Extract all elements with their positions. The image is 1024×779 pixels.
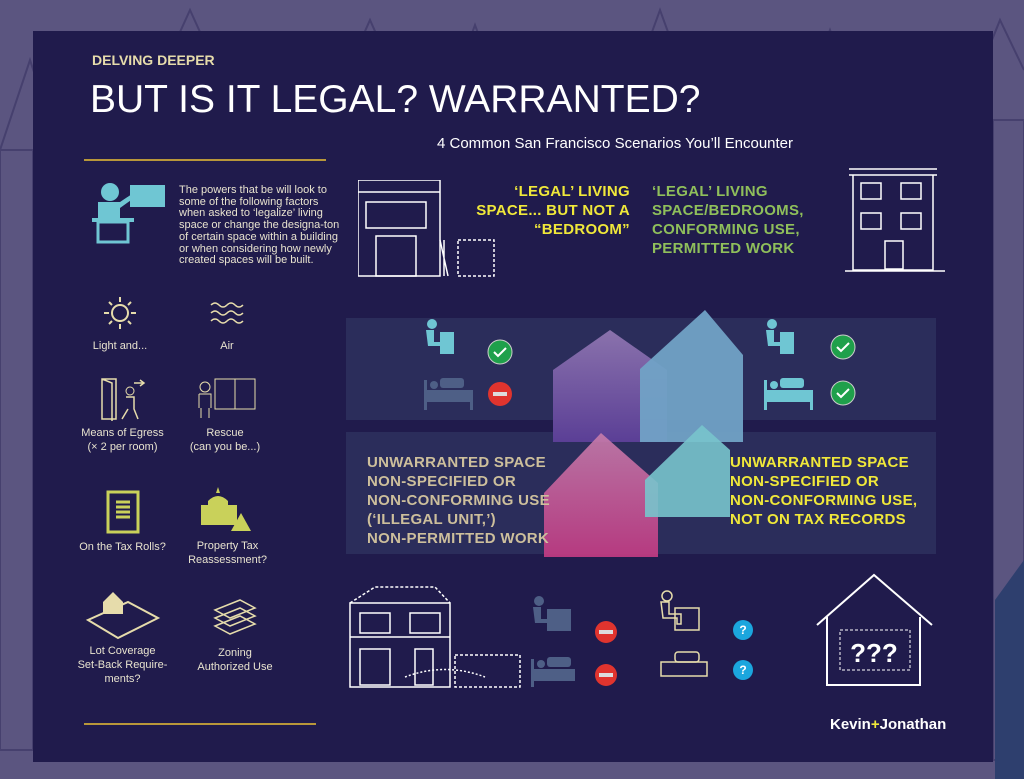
icons left row xyxy=(424,319,512,410)
factor: tax rolls xyxy=(79,490,166,553)
caption: legal bedrooms: PERMITTED WORK xyxy=(652,240,795,257)
title: BUT IS IT LEGAL? WARRANTED? xyxy=(90,78,700,121)
factor: rescue xyxy=(190,378,260,453)
factor: light: Light and... xyxy=(93,340,147,352)
factor: rescue: (can you be...) xyxy=(190,441,260,453)
factor: light xyxy=(93,297,147,352)
caption: legal not bedroom xyxy=(476,183,630,238)
caption: unwarranted right: NOT ON TAX RECORDS xyxy=(730,511,906,528)
illustration: bottom building xyxy=(349,586,521,688)
intro text: The powers that be will look to some of the following factors when asked to ‘legalize’ living space or change the designa-ton of certain space within a building or when considering how newly created spaces will be built. xyxy=(179,184,339,266)
factor: air xyxy=(210,302,244,352)
factor: zoning xyxy=(197,599,273,673)
caption: legal bedrooms: ‘LEGAL’ LIVING xyxy=(652,183,768,200)
factor: lot coverage: ments? xyxy=(104,673,141,685)
factor: egress: Means of Egress xyxy=(81,427,164,439)
band upper xyxy=(346,318,936,420)
caption: unwarranted right: UNWARRANTED SPACE xyxy=(730,454,909,471)
factor: reassessment: Reassessment? xyxy=(188,554,267,566)
factor: tax rolls: On the Tax Rolls? xyxy=(79,541,166,553)
factor: lot coverage xyxy=(78,592,167,685)
caption: legal bedrooms: CONFORMING USE, xyxy=(652,221,800,238)
caption: unwarranted left xyxy=(367,454,550,547)
subtitle: 4 Common San Francisco Scenarios You’ll Encounter xyxy=(437,135,793,152)
caption: unwarranted left: (‘ILLEGAL UNIT,’) xyxy=(367,511,496,528)
caption: legal not bedroom: “BEDROOM” xyxy=(534,221,630,238)
factor: rescue: Rescue xyxy=(206,427,244,439)
factor: zoning: Zoning xyxy=(218,647,252,659)
caption: unwarranted left: UNWARRANTED SPACE xyxy=(367,454,546,471)
factor: egress: (× 2 per room) xyxy=(88,441,158,453)
gold rule top xyxy=(84,159,326,161)
illustration: building top left xyxy=(358,180,495,277)
factor: reassessment xyxy=(188,487,267,566)
illustration: mystery house xyxy=(816,574,933,686)
factor: egress xyxy=(81,378,164,453)
factor: air: Air xyxy=(220,340,234,352)
caption: legal bedrooms: SPACE/BEDROOMS, xyxy=(652,202,804,219)
caption: unwarranted right xyxy=(730,454,917,528)
logo: Kevin+Jonathan xyxy=(830,716,946,733)
factor: reassessment: Property Tax xyxy=(197,540,258,552)
band lower xyxy=(346,432,936,554)
factor: lot coverage: Lot Coverage xyxy=(89,645,156,657)
icon: presenter xyxy=(92,183,165,244)
kicker: DELVING DEEPER xyxy=(92,52,215,68)
caption: legal not bedroom: SPACE... BUT NOT A xyxy=(476,202,630,219)
caption: unwarranted left: NON-SPECIFIED OR xyxy=(367,473,516,490)
factor: lot coverage: Set-Back Require- xyxy=(78,659,167,671)
houses overlay xyxy=(544,310,743,557)
caption: unwarranted right: NON-SPECIFIED OR xyxy=(730,473,879,490)
caption: legal bedrooms xyxy=(652,183,804,257)
gold rule bottom xyxy=(84,723,316,725)
caption: unwarranted right: NON-CONFORMING USE, xyxy=(730,492,917,509)
factor: zoning: Authorized Use xyxy=(197,661,273,673)
illustration: victorian xyxy=(845,168,945,272)
illustration: mystery house: ??? xyxy=(850,638,898,668)
icons bottom mid xyxy=(531,596,617,687)
caption: unwarranted left: NON-PERMITTED WORK xyxy=(367,530,549,547)
text: ? xyxy=(739,663,747,677)
caption: unwarranted left: NON-CONFORMING USE xyxy=(367,492,550,509)
text: ? xyxy=(739,623,747,637)
caption: legal not bedroom: ‘LEGAL’ LIVING xyxy=(514,183,630,200)
